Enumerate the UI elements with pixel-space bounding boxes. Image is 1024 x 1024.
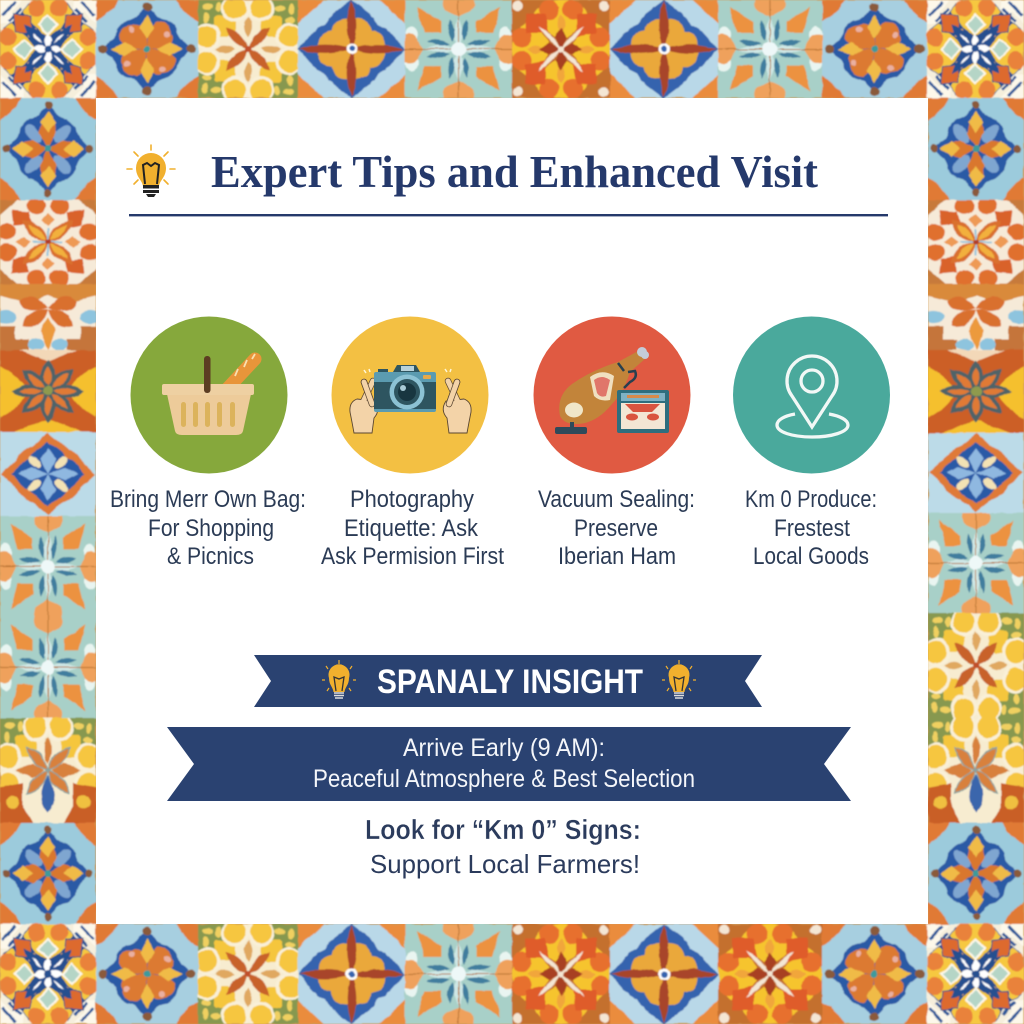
closing note: Support Local Farmers!: [370, 849, 640, 879]
title: Expert Tips and Enhanced Visit: [211, 147, 818, 197]
label: Iberian Ham: [558, 543, 676, 570]
tip: bring your own bag: [110, 316, 306, 570]
tip: photography etiquette: [321, 316, 504, 570]
label: Frestest: [774, 515, 850, 542]
closing note: [365, 814, 641, 879]
top tile row: [0, 0, 1024, 102]
label: [745, 486, 877, 570]
tip: vacuum sealing: [534, 316, 695, 570]
banner: arrive early: Arrive Early (9 AM):: [403, 734, 605, 762]
banner: spanaly insight: [254, 655, 762, 707]
label: Km 0 Produce:: [745, 486, 877, 513]
icon: bulb left: [322, 660, 356, 698]
label: Photography: [350, 486, 474, 513]
icon: ham and vacuum package: [534, 316, 690, 474]
tip: km 0 produce: [733, 316, 890, 570]
icon: basket with baguette: [130, 316, 288, 474]
label: [321, 486, 504, 570]
right tile column: [923, 98, 1024, 924]
left tile column: [0, 98, 101, 924]
label: For Shopping: [148, 515, 274, 542]
label: & Picnics: [167, 543, 254, 570]
label: Etiquette: Ask: [344, 515, 479, 542]
banner: arrive early: Peaceful Atmosphere & Best Selection: [313, 765, 695, 793]
label: Ask Permision First: [321, 543, 504, 570]
closing note: Look for “Km 0” Signs:: [365, 814, 641, 845]
banner heading: SPANALY INSIGHT: [377, 663, 643, 701]
banner: arrive early: [167, 727, 851, 801]
icon: map pin: [733, 316, 890, 474]
bottom tile row: [0, 920, 1024, 1024]
label: Vacuum Sealing:: [538, 486, 695, 513]
label: [538, 486, 695, 570]
label: [110, 486, 306, 570]
title rule: [129, 214, 888, 216]
icon: bulb right: [662, 660, 696, 698]
icon: camera with crossed fingers: [332, 316, 488, 474]
label: Preserve: [574, 515, 658, 542]
panel: white content area: [96, 98, 928, 924]
label: Local Goods: [753, 543, 869, 570]
icon: title light bulb: [127, 145, 175, 197]
label: Bring Merr Own Bag:: [110, 486, 306, 513]
